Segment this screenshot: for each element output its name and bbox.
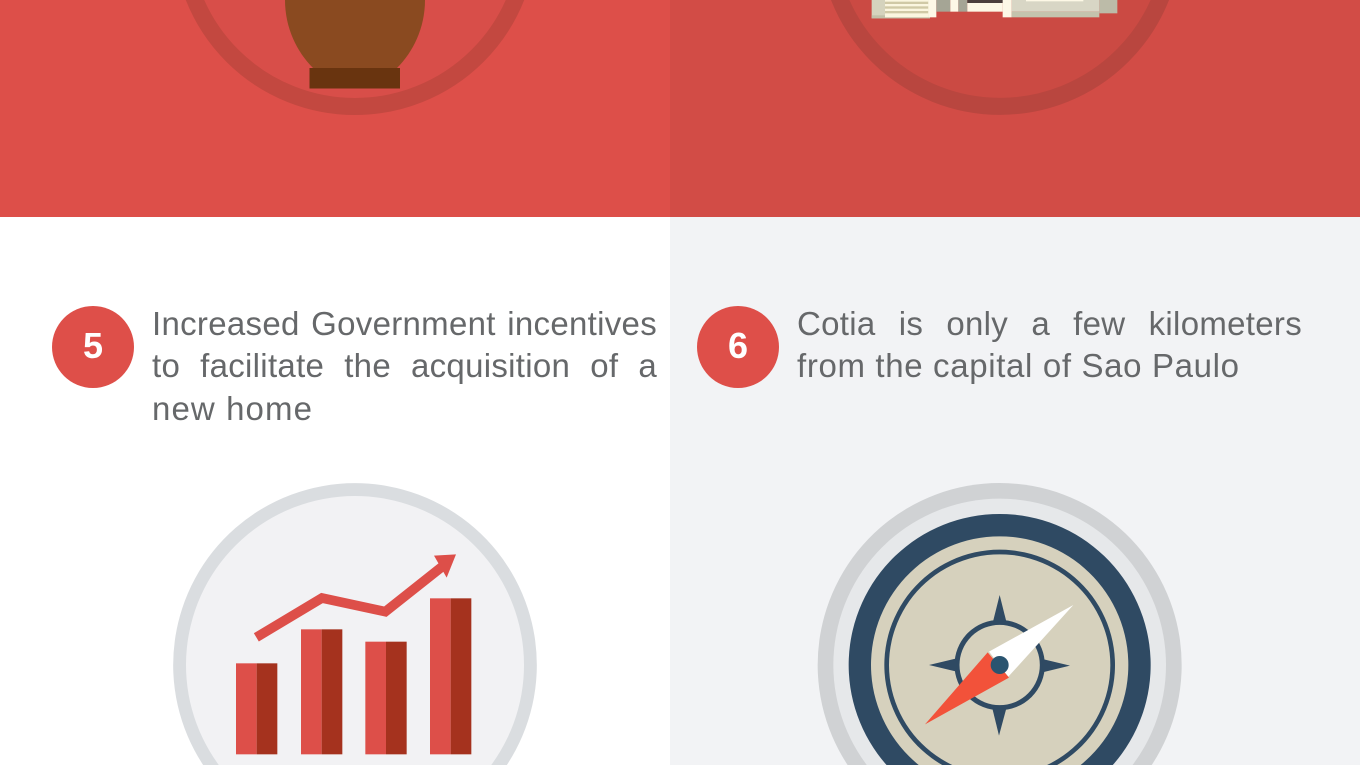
panel: top left red background [0,0,670,217]
text block: reason 5: to facilitate the acquisition of a [152,347,657,384]
number badge 6: 6 [728,325,748,366]
text block: reason 5 [152,304,657,426]
number badge 5 [52,306,134,388]
icon: compass in circle [818,483,1182,765]
text block: reason 6: Cotia is only a few kilometers [797,304,1302,342]
text block: reason 5: new home [152,390,313,426]
number badge 6 [697,306,779,388]
icon: house in circle [831,0,1169,115]
text block: reason 6 [797,304,1302,384]
icon: vase in circle [186,0,524,115]
icon: growth bar chart in circle [173,483,537,765]
panel: top right red background [670,0,1360,217]
text block: reason 5: Increased Government incentives [152,304,657,342]
number badge 5: 5 [83,325,103,366]
panel: bottom left white background [0,217,670,765]
text block: reason 6: from the capital of Sao Paulo [797,347,1240,384]
panel: bottom right grey background [670,217,1360,765]
